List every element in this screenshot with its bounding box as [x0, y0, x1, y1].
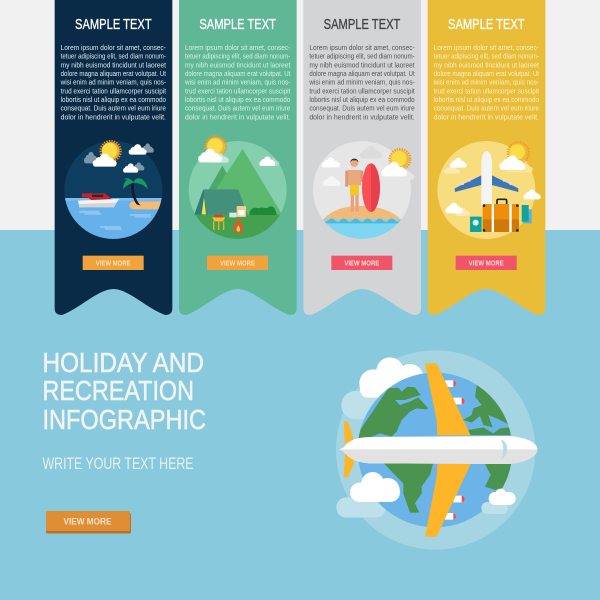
- panel: navy sea: [55, 0, 173, 315]
- text block: green panel: wisi enim ad minim veniam, quis nos-: [184, 78, 291, 87]
- subtitle: WRITE YOUR TEXT HERE: [42, 455, 194, 473]
- button: main view more: VIEW MORE: [64, 516, 112, 526]
- airplane: [339, 363, 537, 537]
- text block: navy panel: my nibh euismod tincidunt ut laoreet: [61, 60, 166, 69]
- text block: grey panel: dolor in hendrerit in vulputate velit.: [309, 112, 415, 121]
- text block: green panel: tetuer adipiscing elit, sed diam nonum-: [185, 52, 291, 61]
- title: INFOGRAPHIC: [42, 404, 206, 435]
- text block: navy panel: consequat. Duis autem vel eum iriure: [61, 104, 166, 113]
- text block: green panel: trud exerci tation ullamcorper suscipit: [185, 86, 290, 95]
- illustration: boat and palm island: [64, 140, 162, 239]
- illustration: plane and luggage: [437, 141, 541, 239]
- engines: [445, 380, 465, 520]
- button: main view more: [46, 511, 131, 534]
- globe: [353, 373, 520, 527]
- illustration: surfer on island: [313, 141, 414, 239]
- background: upper band: [0, 0, 600, 230]
- text block: yellow panel: tetuer adipiscing elit, sed diam nonum-: [434, 52, 539, 61]
- text block: grey panel: consequat. Duis autem vel eum iriure: [309, 104, 415, 113]
- button: view more navy panel: [83, 256, 144, 270]
- button: view more yellow panel: VIEW MORE: [469, 260, 504, 267]
- panel: yellow travel: [428, 0, 545, 315]
- text block: yellow panel: lobortis nisl ut aliquip ex ea commodo: [434, 95, 539, 104]
- panel: green camping: [179, 0, 297, 315]
- text block: green panel: Lorem ipsum dolor sit amet, consec-: [185, 43, 291, 52]
- text block: grey panel: dolore magna aliquam erat volutpat. Ut: [309, 69, 415, 78]
- text block: navy panel: trud exerci tation ullamcorper suscipit: [61, 86, 166, 95]
- text block: grey panel: lobortis nisl ut aliquip ex ea commodo: [309, 95, 415, 104]
- heading: navy panel: SAMPLE TEXT: [75, 17, 152, 33]
- heading: green panel: SAMPLE TEXT: [199, 17, 276, 33]
- button: view more navy panel: VIEW MORE: [96, 260, 131, 267]
- heading: grey panel: SAMPLE TEXT: [324, 17, 400, 33]
- front clouds: [350, 472, 516, 514]
- text block: grey panel: Lorem ipsum dolor sit amet, consec-: [309, 43, 415, 52]
- text block: navy panel: tetuer adipiscing elit, sed diam nonum-: [61, 52, 166, 61]
- title: RECREATION: [42, 375, 194, 406]
- text block: green panel: dolor in hendrerit in vulputate velit.: [185, 112, 290, 121]
- text block: yellow panel: my nibh euismod tincidunt ut laoreet: [434, 60, 539, 69]
- cockpit window: [501, 439, 507, 460]
- button: view more green panel: VIEW MORE: [220, 260, 255, 267]
- panel: grey surfing: [303, 0, 421, 315]
- text block: grey panel: [308, 43, 415, 121]
- globe halo: [336, 350, 535, 550]
- title: [42, 347, 206, 435]
- heading: yellow panel: SAMPLE TEXT: [448, 17, 525, 33]
- text block: navy panel: Lorem ipsum dolor sit amet, consec-: [61, 43, 167, 52]
- text block: yellow panel: consequat. Duis autem vel eum iriure: [434, 104, 539, 113]
- text block: yellow panel: trud exerci tation ullamcorper suscipit: [434, 86, 539, 95]
- text block: grey panel: tetuer adipiscing elit, sed diam nonum-: [309, 52, 415, 61]
- text block: grey panel: trud exerci tation ullamcorper suscipit: [309, 86, 415, 95]
- text block: green panel: dolore magna aliquam erat volutpat. Ut: [185, 69, 290, 78]
- title: HOLIDAY AND: [42, 347, 204, 378]
- illustration: globe with airplane: [336, 350, 537, 550]
- button: view more grey panel: VIEW MORE: [344, 260, 380, 267]
- fuselage: [339, 436, 537, 464]
- text block: navy panel: lobortis nisl ut aliquip ex ea commodo: [61, 95, 166, 104]
- text block: navy panel: [60, 43, 167, 121]
- back clouds: [336, 357, 423, 518]
- background: lower blue area: [0, 230, 600, 600]
- text block: yellow panel: wisi enim ad minim veniam, quis nos-: [433, 78, 539, 87]
- text block: navy panel: dolor in hendrerit in vulputate velit.: [61, 112, 166, 121]
- text block: navy panel: wisi enim ad minim veniam, quis nos-: [60, 78, 166, 87]
- text block: grey panel: my nibh euismod tincidunt ut laoreet: [309, 60, 415, 69]
- text block: yellow panel: Lorem ipsum dolor sit amet, consec-: [434, 43, 540, 52]
- text block: green panel: my nibh euismod tincidunt ut laoreet: [185, 60, 290, 69]
- text block: yellow panel: dolor in hendrerit in vulputate velit.: [434, 112, 539, 121]
- text block: navy panel: dolore magna aliquam erat volutpat. Ut: [61, 69, 166, 78]
- button: view more grey panel: [331, 256, 392, 270]
- illustration: camping in mountains: [188, 135, 287, 239]
- text block: green panel: consequat. Duis autem vel eum iriure: [185, 104, 290, 113]
- text block: yellow panel: [433, 43, 540, 121]
- text block: green panel: lobortis nisl ut aliquip ex ea commodo: [185, 95, 290, 104]
- text block: green panel: [184, 43, 291, 121]
- button: view more yellow panel: [456, 256, 517, 270]
- text block: yellow panel: dolore magna aliquam erat volutpat. Ut: [434, 69, 539, 78]
- text block: grey panel: wisi enim ad minim veniam, quis nos-: [308, 78, 415, 87]
- button: view more green panel: [207, 256, 268, 270]
- wings and tail: [344, 363, 471, 537]
